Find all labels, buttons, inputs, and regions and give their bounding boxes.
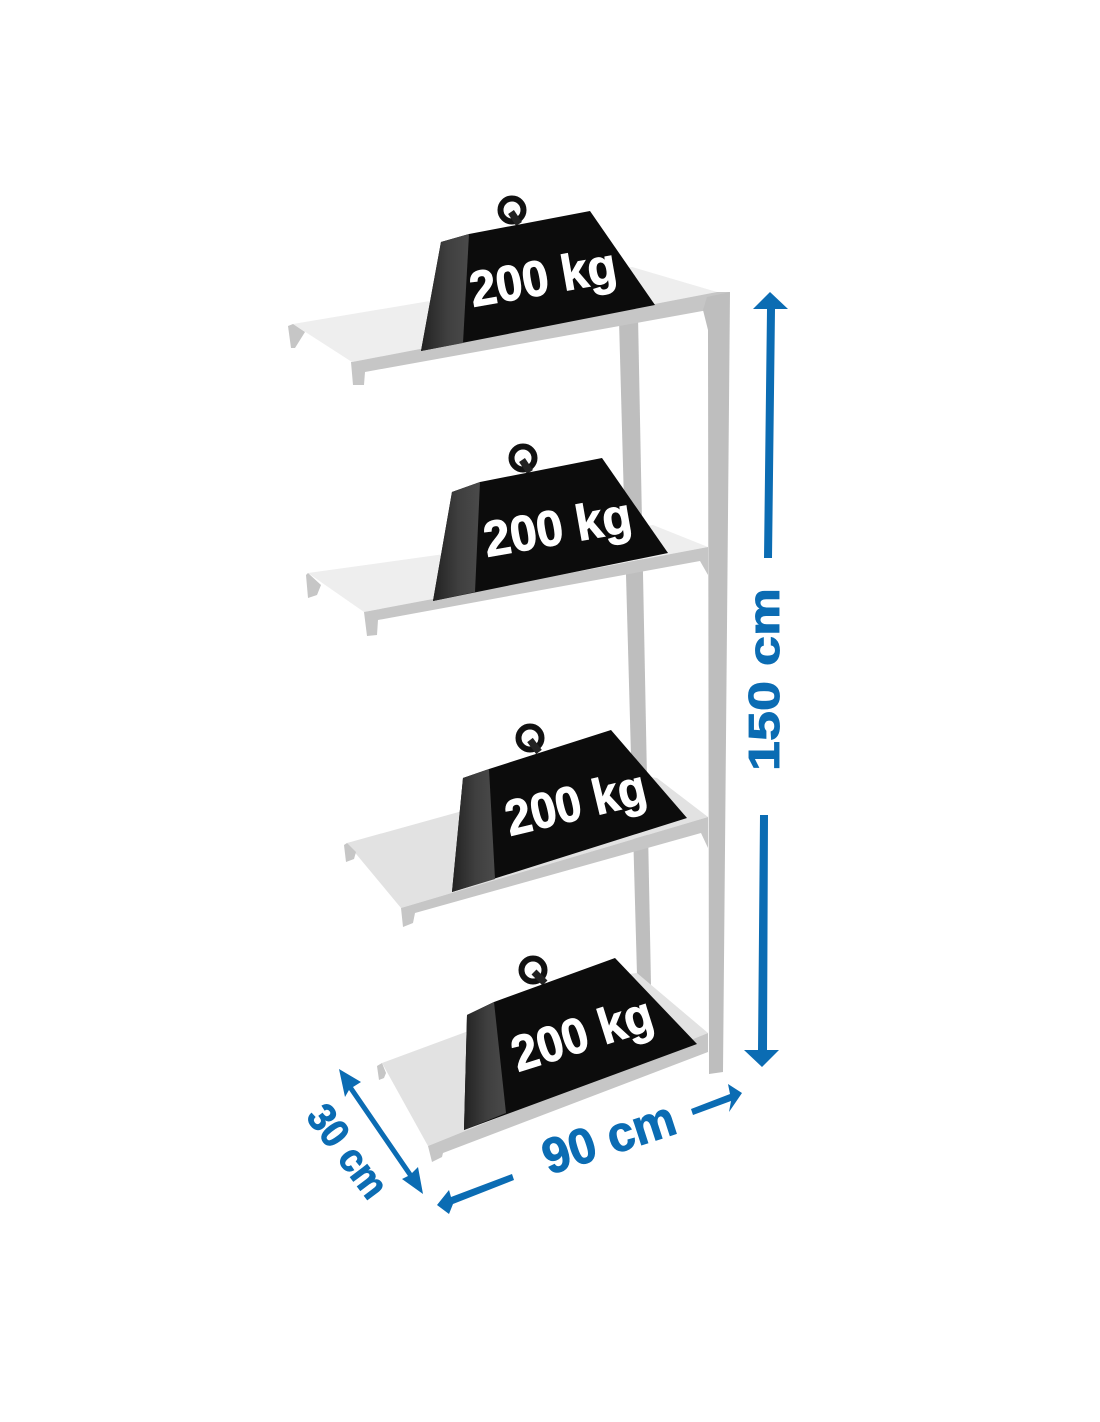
shelf 2 front beam and feet xyxy=(364,547,708,636)
height label: 150 cm xyxy=(740,588,789,771)
ring xyxy=(518,726,542,752)
shelf 4 (bottom) xyxy=(377,958,708,1162)
rear post xyxy=(619,316,651,985)
width dimension: 90 cm xyxy=(437,1084,742,1214)
shelf 1 front beam and feet xyxy=(351,292,730,385)
ring xyxy=(500,198,524,224)
shelf 4 left foot xyxy=(377,1063,386,1080)
upper arrow xyxy=(753,292,788,558)
left arrow xyxy=(437,1174,514,1214)
weight label: 200 kg xyxy=(465,237,621,318)
right arrow xyxy=(691,1084,742,1115)
shelf 2 xyxy=(306,446,708,636)
double-headed arrow xyxy=(339,1069,423,1194)
shelf 1 (top) xyxy=(288,198,730,385)
shelf 3 left foot xyxy=(344,843,356,862)
shelf 1 surface xyxy=(293,267,717,362)
shelf 2 weight xyxy=(433,446,668,601)
shelf 4 front beam and feet xyxy=(428,1033,708,1162)
ring xyxy=(512,446,534,472)
shelf 2 left foot xyxy=(306,573,321,598)
width label: 90 cm xyxy=(535,1090,683,1185)
shelf 4 weight xyxy=(464,958,697,1130)
weight label: 200 kg xyxy=(479,487,636,568)
weight label: 200 kg xyxy=(504,985,660,1082)
height dimension: 150 cm xyxy=(740,292,789,1067)
shelf 3 xyxy=(344,726,708,927)
ring xyxy=(522,958,545,983)
shelf 1 left foot xyxy=(288,324,305,348)
shelf 3 weight xyxy=(452,726,687,892)
shelf 2 surface xyxy=(308,525,708,612)
shelf 3 front beam and feet xyxy=(401,817,708,927)
front post xyxy=(703,292,730,1074)
shelf 1 weight xyxy=(421,198,655,351)
depth label: 30 cm xyxy=(298,1096,397,1207)
depth dimension: 30 cm xyxy=(298,1069,423,1207)
shelf 4 surface xyxy=(382,973,708,1146)
weight label: 200 kg xyxy=(499,759,652,847)
lower arrow xyxy=(744,815,779,1067)
shelf 3 surface xyxy=(347,770,708,908)
